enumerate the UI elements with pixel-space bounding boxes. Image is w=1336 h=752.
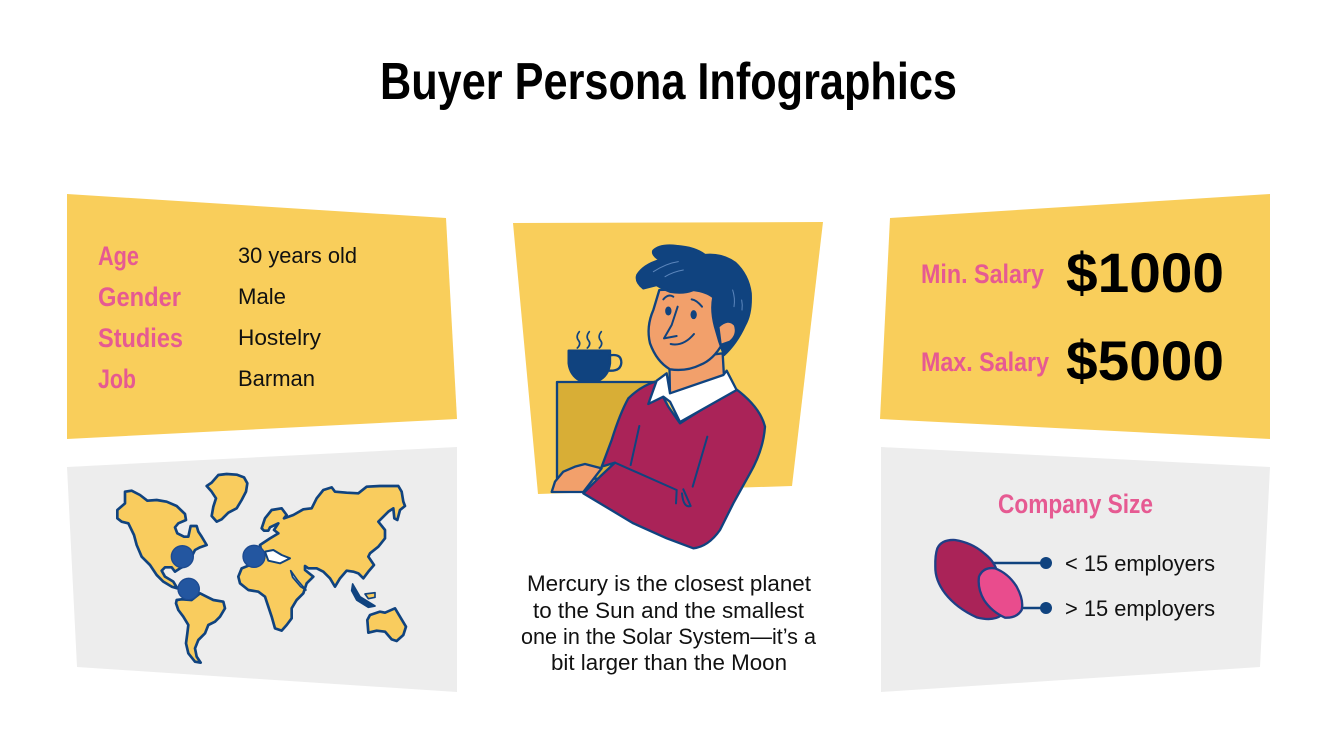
ear xyxy=(718,322,736,345)
illustration: man with coffee xyxy=(552,246,765,548)
panel: salary xyxy=(880,194,1270,439)
world map xyxy=(117,474,406,663)
connector: small companies xyxy=(993,557,1052,569)
sleeve lines xyxy=(615,426,707,506)
sea: red sea xyxy=(291,571,306,590)
continent: north america xyxy=(117,491,207,588)
label: job: Job xyxy=(98,364,136,394)
connector: large companies xyxy=(1018,602,1052,614)
description text: Mercury is the closest planet xyxy=(527,571,811,596)
panel: persona illustration xyxy=(513,222,823,548)
neck xyxy=(669,353,724,395)
nose and smile xyxy=(664,307,694,344)
continent: south america xyxy=(176,593,225,663)
chart: overlapping blobs xyxy=(935,540,1022,619)
hair highlights xyxy=(653,262,742,310)
island: borneo xyxy=(365,593,375,599)
coffee cup xyxy=(569,332,621,381)
panel: world map xyxy=(67,447,457,692)
sweater body xyxy=(583,382,765,548)
face xyxy=(649,288,723,370)
label: maximum salary: Max. Salary xyxy=(921,347,1049,377)
description text: one in the Solar System—it’s a xyxy=(521,624,817,649)
description text: bit larger than the Moon xyxy=(551,650,787,675)
marker: north america xyxy=(171,546,193,568)
hand xyxy=(552,464,602,492)
label: age: Age xyxy=(98,241,139,271)
title: Buyer Persona Infographics xyxy=(380,53,957,111)
sea: mediterranean xyxy=(265,550,290,563)
value: gender: Male xyxy=(238,284,286,309)
panel: company size xyxy=(881,447,1270,692)
panel: personal details xyxy=(67,194,457,439)
heading: company size: Company Size xyxy=(998,489,1153,519)
marker: europe xyxy=(243,545,265,567)
legend: more than 15: > 15 employers xyxy=(1065,596,1215,621)
island: indonesia xyxy=(352,584,375,607)
description text: to the Sun and the smallest xyxy=(533,598,804,623)
hair xyxy=(637,246,751,355)
label: studies: Studies xyxy=(98,323,183,353)
description text xyxy=(521,571,817,675)
continent: eurasia and africa xyxy=(238,486,405,631)
cabinet xyxy=(557,382,657,479)
marker: central america xyxy=(178,578,199,600)
legend: less than 15: < 15 employers xyxy=(1065,551,1215,576)
continent: greenland xyxy=(207,474,247,522)
value: job: Barman xyxy=(238,366,315,391)
value: minimum salary: $1000 xyxy=(1066,241,1224,304)
value: maximum salary: $5000 xyxy=(1066,329,1224,392)
continent: australia xyxy=(367,608,406,641)
value: studies: Hostelry xyxy=(238,325,321,350)
eyes and brows xyxy=(663,295,702,307)
collar xyxy=(648,371,737,422)
value: age: 30 years old xyxy=(238,243,357,268)
label: minimum salary: Min. Salary xyxy=(921,259,1044,289)
label: gender: Gender xyxy=(98,282,181,312)
